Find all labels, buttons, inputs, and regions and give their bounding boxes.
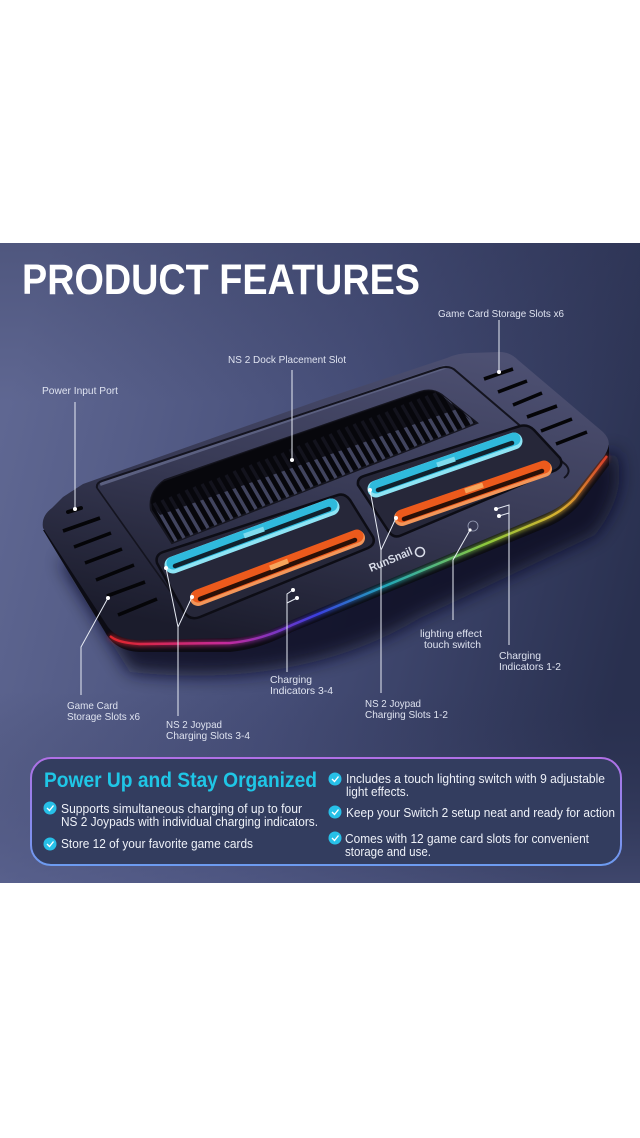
label: charging indicators 3-4: Charging [270, 674, 312, 686]
label: lighting effect touch switch [420, 528, 482, 651]
label: power input port: Power Input Port [42, 385, 118, 397]
touch switch icon [468, 521, 478, 531]
bullet: game card slots [328, 831, 589, 859]
device lower body [43, 445, 609, 652]
bullet: store game cards: Store 12 of your favorite game cards [61, 836, 253, 851]
label: charging indicators 1-2: Indicators 1-2 [499, 661, 561, 673]
label: charging indicators 1-2: Charging [499, 650, 541, 662]
label: dock placement slot [228, 354, 346, 462]
label: game card storage slots top: Game Card Storage Slots x6 [438, 308, 564, 320]
device top face [43, 352, 609, 640]
label: joypad slots 3-4: Charging Slots 3-4 [166, 730, 250, 742]
bullet: keep setup neat: Keep your Switch 2 setup neat and ready for action [346, 805, 615, 820]
orange slot left [198, 536, 357, 599]
game card slots right [484, 369, 587, 444]
label: joypad slots 1-2 [365, 488, 448, 721]
raised rear edge [100, 367, 445, 484]
game card slots left [63, 508, 157, 615]
NS 2 dock placement slot [140, 385, 477, 543]
bullet: simultaneous charging: NS 2 Joypads with individual charging indicators. [61, 814, 318, 829]
cyan slot right [376, 439, 514, 490]
cyan slot left [173, 505, 331, 566]
bullet: touch lighting switch [328, 771, 605, 799]
bullet: touch lighting switch: light effects. [346, 784, 409, 799]
label: charging indicators 3-4 [270, 588, 333, 697]
joypad panel right [358, 426, 561, 536]
label: joypad slots 1-2: NS 2 Joypad [365, 698, 421, 710]
label: game card storage slots left: Storage Slots x6 [67, 711, 140, 723]
label: dock placement slot: NS 2 Dock Placement Slot [228, 354, 346, 366]
label: joypad slots 1-2: Charging Slots 1-2 [365, 709, 448, 721]
RGB light strip [110, 456, 607, 644]
panel heading: Power Up and Stay Organized [44, 769, 317, 792]
bullet: game card slots: storage and use. [345, 844, 431, 859]
recessed tray groove [97, 367, 569, 488]
label: charging indicators 1-2 [494, 505, 561, 673]
label: joypad slots 3-4 [164, 566, 250, 742]
label: charging indicators 3-4: Indicators 3-4 [270, 685, 333, 697]
joypad panel left [157, 495, 374, 618]
background [0, 243, 640, 883]
label: game card storage slots left: Game Card [67, 700, 118, 712]
label: game card storage slots left [67, 596, 140, 723]
device shadow [60, 450, 620, 676]
label: power input port [42, 385, 118, 511]
label: joypad slots 3-4: NS 2 Joypad [166, 719, 222, 731]
label: lighting effect touch switch: lighting effect [420, 628, 482, 640]
orange slot right [402, 467, 544, 519]
panel: power up and stay organized [31, 758, 621, 865]
label: lighting effect touch switch: touch switch [424, 639, 481, 651]
brand logo: RunSnail [367, 546, 415, 575]
bullet: simultaneous charging [44, 801, 318, 829]
bullet: game card slots: Comes with 12 game card slots for convenient [345, 831, 589, 846]
title: PRODUCT FEATURES [22, 256, 420, 304]
bullet: simultaneous charging: Supports simultaneous charging of up to four [61, 801, 303, 816]
label: game card storage slots top [438, 308, 564, 374]
product: charging dock [43, 352, 619, 676]
bullet: touch lighting switch: Includes a touch lighting switch with 9 adjustable [346, 771, 605, 786]
